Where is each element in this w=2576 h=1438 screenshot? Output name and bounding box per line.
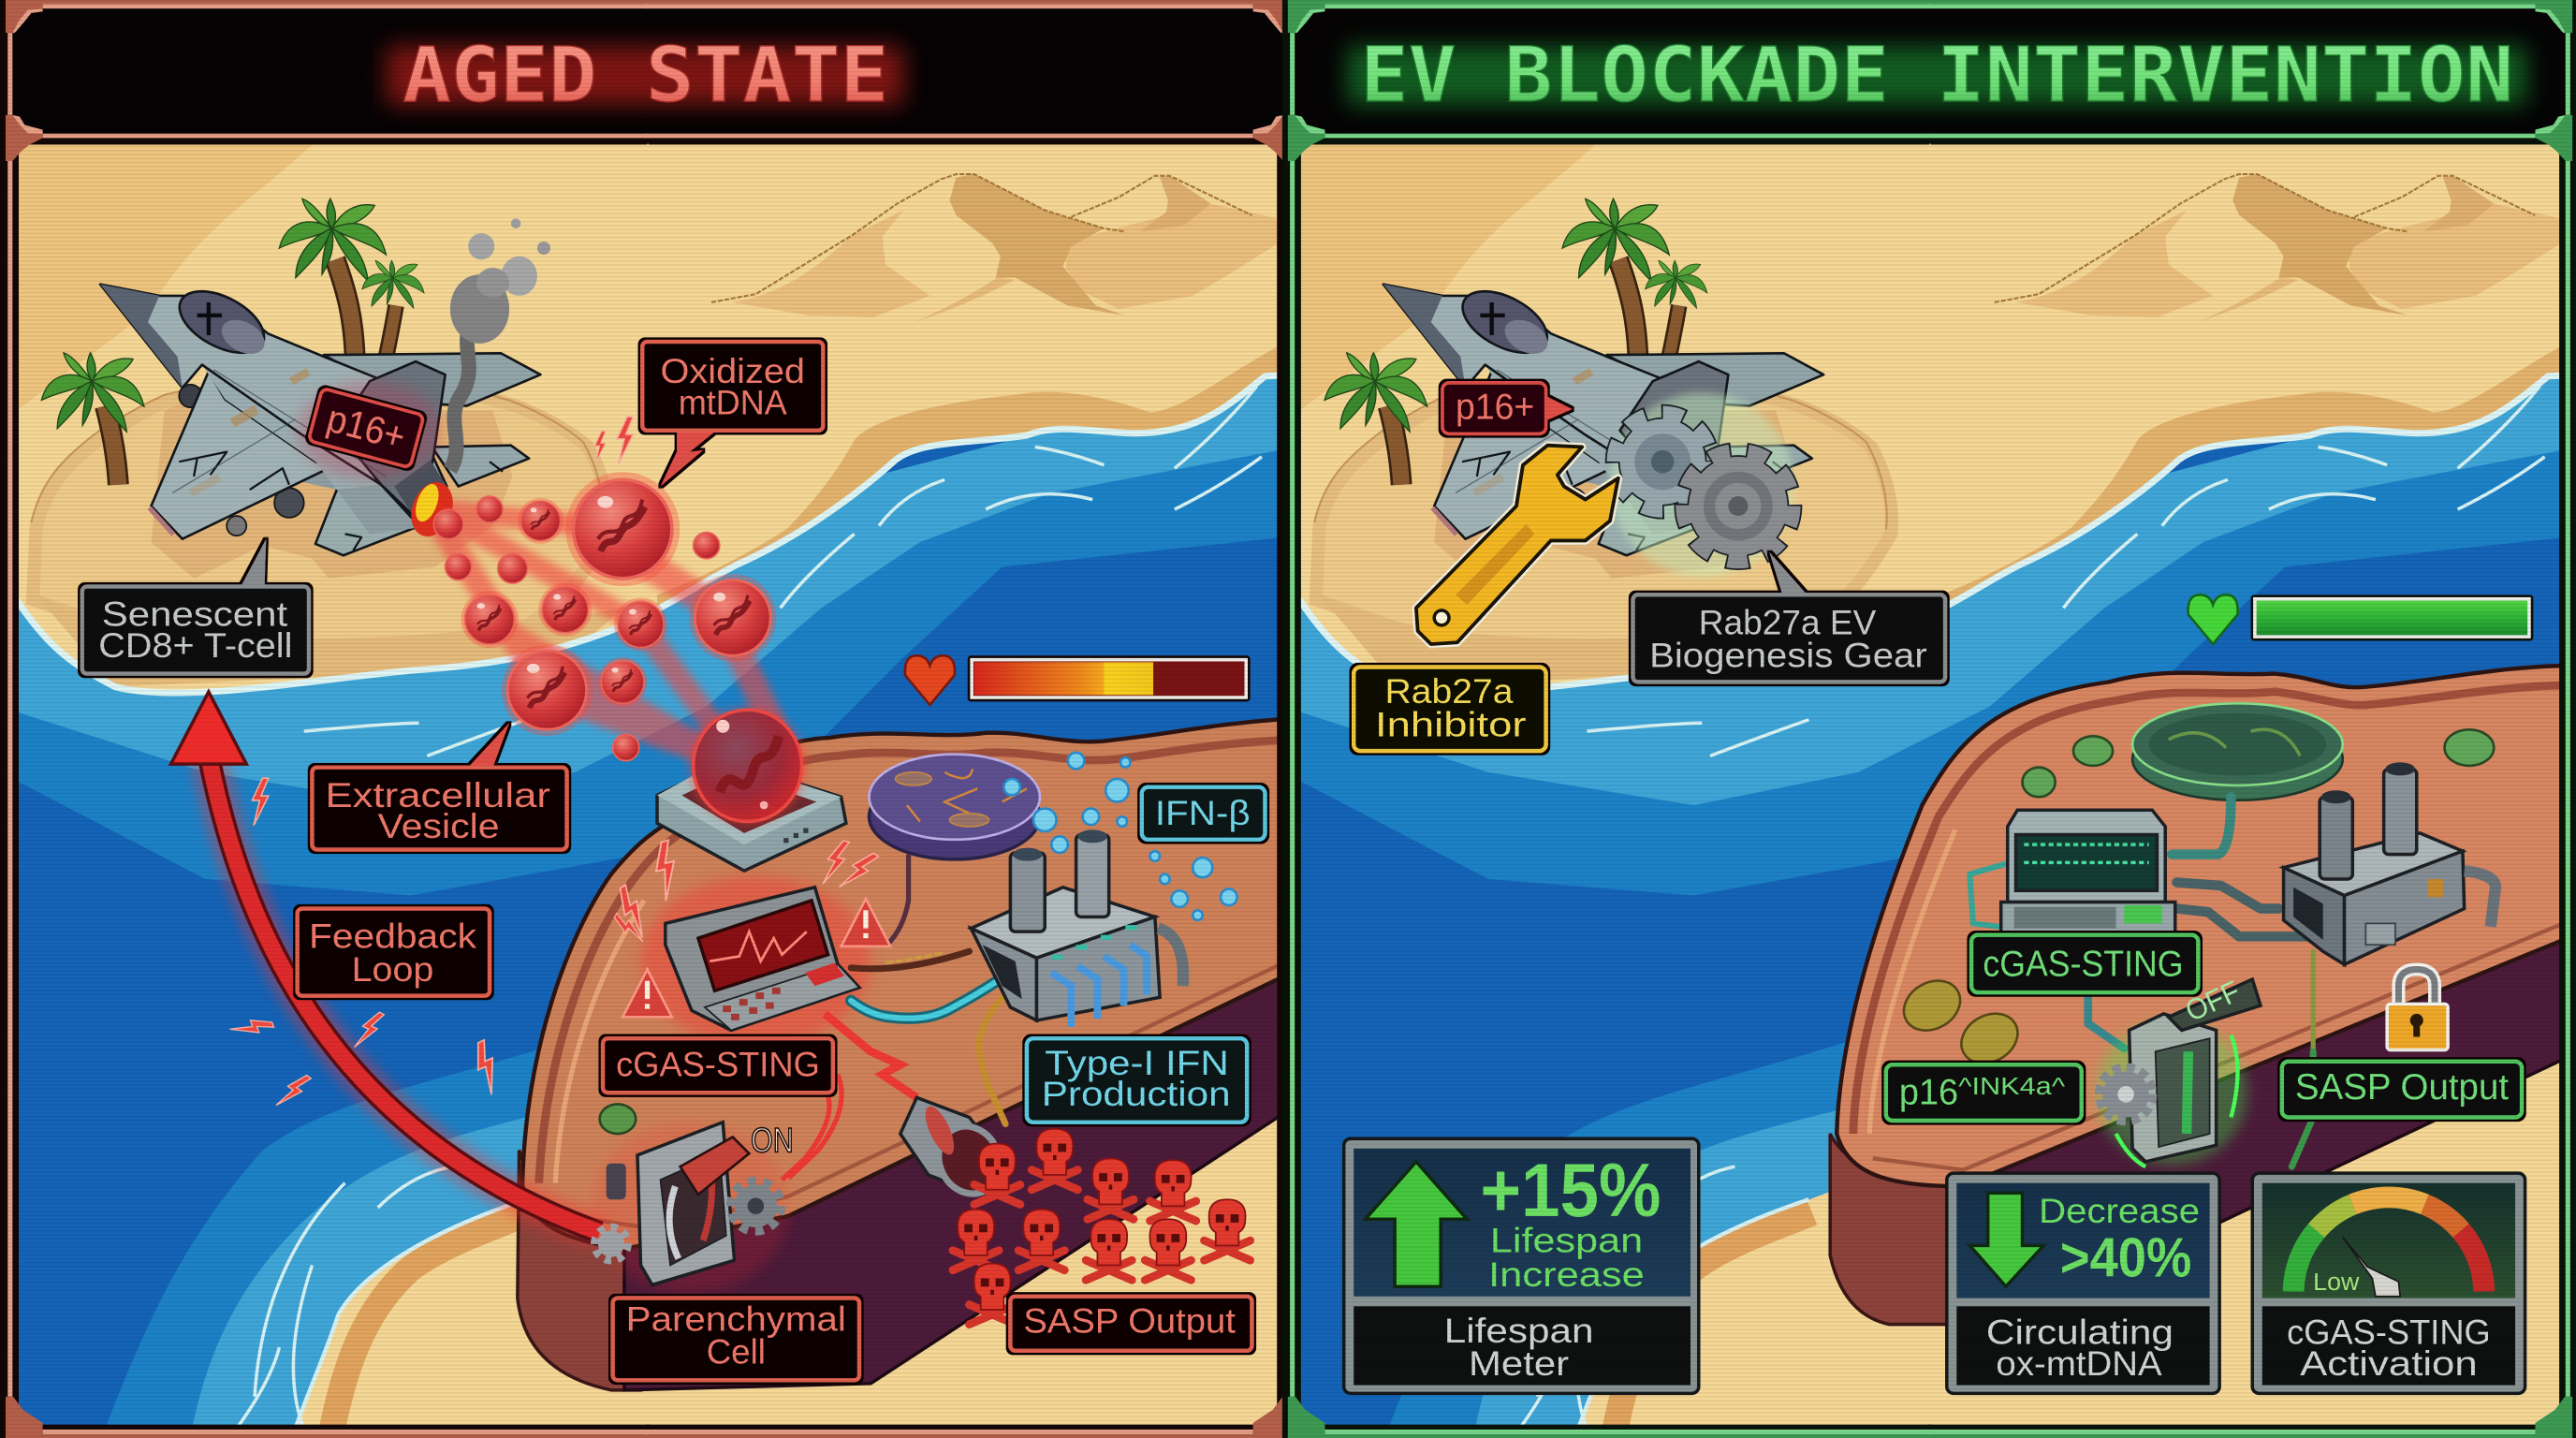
up arrow (1365, 1162, 1467, 1286)
card name (1986, 1313, 2174, 1383)
label: p16+ (308, 389, 424, 468)
large docked vesicle (688, 707, 807, 825)
card name: Lifespan (1444, 1312, 1593, 1350)
label: p16 INK4a: ^INK4a^ (1958, 1072, 2066, 1100)
EV stream glow beams (431, 509, 772, 772)
feedback loop arrow (171, 692, 600, 1232)
switch OFF (2097, 979, 2261, 1167)
card name: Activation (2300, 1344, 2478, 1383)
label: Rab27a inhibitor: Inhibitor (1375, 705, 1526, 743)
panel: EV blockade intervention (1283, 131, 2576, 1438)
title: AGED STATE: AGED STATE (402, 32, 889, 120)
down arrow (1969, 1193, 2043, 1286)
label: extracellular vesicle: Vesicle (378, 807, 500, 845)
label: p16 INK4a: p16 (1899, 1072, 1958, 1112)
label: OFF: OFF (2180, 974, 2245, 1028)
label: p16+ tag (1442, 383, 1573, 433)
wires from monitor to factory (851, 951, 1005, 1123)
parenchymal cell body (518, 718, 1298, 1390)
extracellular vesicles (433, 472, 777, 761)
connecting pipes (1969, 797, 2313, 1167)
value: +15%: +15% (1480, 1149, 1661, 1233)
label: oxidized mtDNA: Oxidized (661, 352, 805, 390)
green organelle (600, 1104, 636, 1134)
frame: aged state header and border (0, 0, 1295, 1438)
mitochondria dish (869, 755, 1040, 945)
label: SASP output (green) (2282, 1062, 2522, 1117)
factory (offline) (2284, 762, 2496, 964)
label: Rab27a EV biogenesis gear: Rab27a EV (1699, 603, 1877, 641)
value: >40%: >40% (2060, 1226, 2191, 1289)
label: senescent CD8+ T-cell (82, 539, 309, 674)
cGAS-STING terminal (calm) (2001, 810, 2175, 935)
SASP skull cloud (953, 1129, 1251, 1325)
gauge arc (2293, 1197, 2484, 1292)
title: EV BLOCKADE INTERVENTION: EV BLOCKADE INTERVENTION (1360, 32, 2513, 120)
stat card: circulating ox-mtDNA (1947, 1173, 2219, 1393)
parenchymal cell body (healthy) (1830, 666, 2576, 1325)
exhaust flame (404, 477, 461, 542)
label: p16 INK4a (1886, 1064, 2082, 1121)
label: oxidized mtDNA (642, 342, 823, 487)
cGAS-STING alarm monitor (640, 875, 871, 1047)
smoke plume (450, 218, 550, 470)
interferon particles (1003, 753, 1237, 920)
caption: lifespan increase: Lifespan (1490, 1221, 1643, 1259)
label: parenchymal cell: Parenchymal (626, 1300, 846, 1339)
label: Rab27a inhibitor: Rab27a (1385, 672, 1514, 711)
stat card: lifespan meter (1344, 1138, 1699, 1393)
label: cGAS-STING (green) (1971, 935, 2198, 992)
interferon factory (971, 829, 1183, 1027)
feedback lightning (229, 417, 633, 1113)
label: Rab27a inhibitor (1354, 668, 1546, 751)
label: feedback loop: Loop (352, 950, 433, 989)
label: cGAS-STING: cGAS-STING (616, 1046, 820, 1084)
card name: cGAS-STING (2287, 1313, 2491, 1352)
wrench: Rab27a inhibitor (1416, 446, 1618, 644)
caption: lifespan increase: Increase (1488, 1255, 1645, 1294)
Rab27a EV biogenesis gears (1610, 392, 1794, 577)
label: Rab27a EV biogenesis gear: Biogenesis Gear (1649, 637, 1927, 675)
label: extracellular vesicle (312, 723, 567, 849)
label: ON: ON (751, 1121, 794, 1159)
label: cGAS-STING (green): cGAS-STING (1983, 945, 2184, 985)
label: type-I IFN production: Production (1042, 1075, 1231, 1113)
label: senescent CD8+ T-cell: Senescent (102, 595, 287, 634)
label: IFN-beta: IFN-β (1155, 794, 1251, 832)
title glow: aged state (386, 46, 903, 105)
card name: Meter (1469, 1344, 1569, 1383)
p16 glow on jet (298, 381, 442, 479)
warning triangles (622, 899, 890, 1017)
label: SASP output (1010, 1297, 1251, 1351)
card name: Circulating (1986, 1313, 2174, 1352)
red signal wires (782, 1014, 916, 1180)
vesicle docking socket (657, 759, 846, 871)
gauge needle (2343, 1238, 2400, 1297)
label: SASP output: SASP Output (1023, 1301, 1236, 1340)
card name (1444, 1312, 1593, 1383)
SASP outlet pipe (900, 1097, 1011, 1204)
label: IFN-beta (1142, 787, 1265, 840)
mitochondria dish (green) (2132, 703, 2343, 800)
gauge: Low: Low (2313, 1268, 2360, 1296)
label: feedback loop: Feedback (309, 917, 477, 956)
title glow: intervention (1347, 46, 2526, 105)
label: type-I IFN production: Type-I IFN (1045, 1044, 1229, 1082)
card name: ox-mtDNA (1996, 1344, 2162, 1383)
beach and ocean backdrop (right) (1283, 131, 2576, 1438)
label: feedback loop (298, 909, 490, 996)
green and olive organelles (1895, 729, 2494, 1073)
label: parenchymal cell: Cell (707, 1333, 766, 1372)
activation switch ON (592, 1123, 788, 1293)
label: p16+ tag: p16+ (1456, 388, 1534, 428)
frame: intervention header and border (1282, 0, 2576, 1438)
caption: lifespan increase (1488, 1221, 1645, 1294)
label: cGAS-STING (603, 1038, 833, 1093)
panel: aged state (0, 131, 1314, 1438)
label: SASP output (green): SASP Output (2295, 1067, 2509, 1108)
label: parenchymal cell (613, 1299, 859, 1380)
stat card: cGAS-STING activation (2252, 1173, 2525, 1393)
health bar: full (2188, 594, 2533, 644)
health bar: damaged (905, 655, 1251, 705)
red lightning around monitor (610, 838, 878, 943)
jet: rescued T-cell with palms (1325, 198, 1823, 555)
caption: decrease: Decrease (2039, 1192, 2200, 1230)
label: extracellular vesicle: Extracellular (326, 776, 550, 814)
jet: senescent T-cell with palms (41, 198, 540, 555)
label: type-I IFN production (1027, 1038, 1247, 1123)
label: Rab27a EV biogenesis gear (1633, 552, 1945, 682)
label: oxidized mtDNA: mtDNA (679, 383, 787, 421)
label: senescent CD8+ T-cell: CD8+ T-cell (98, 626, 292, 665)
label: p16+: p16+ (323, 396, 410, 458)
beach and ocean backdrop (left) (0, 131, 1314, 1438)
card name (2287, 1313, 2491, 1383)
padlock (2387, 970, 2448, 1050)
